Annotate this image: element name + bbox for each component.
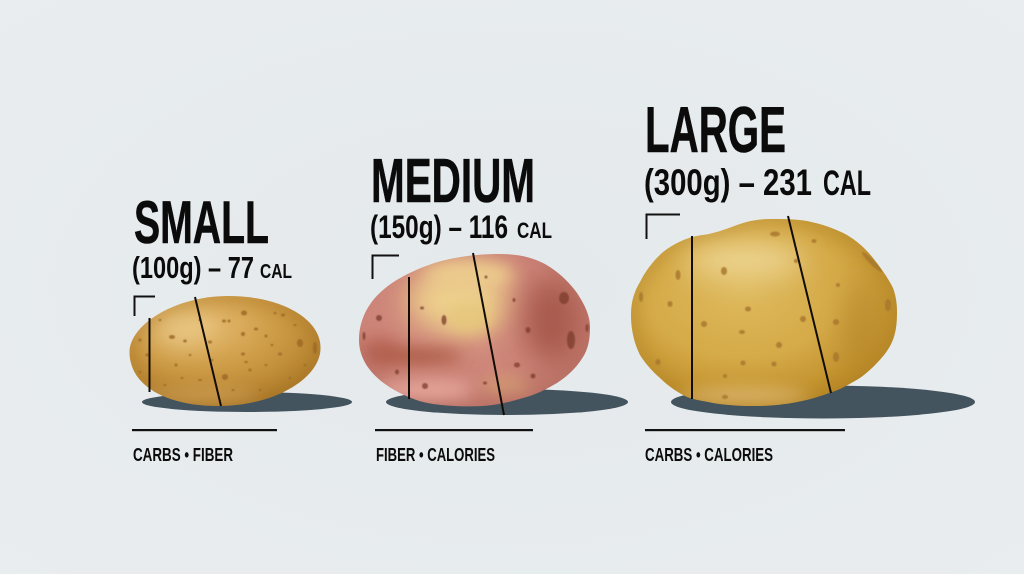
panel: small potato: [125, 189, 352, 465]
shadow: medium: [386, 389, 628, 415]
divider: small: [132, 429, 277, 431]
heading: medium: MEDIUM: [371, 147, 535, 216]
nutrients: medium: FIBER • CALORIES: [376, 445, 495, 465]
potato: small: [130, 296, 320, 406]
corner bracket: medium: [372, 256, 399, 279]
heading: small: SMALL: [134, 189, 269, 256]
nutrients: large: CARBS • CALORIES: [645, 445, 773, 465]
shadow: large: [671, 386, 975, 418]
shadow: small: [142, 392, 352, 412]
panel: large potato: [625, 93, 975, 465]
nutrients: small: CARBS • FIBER: [133, 445, 233, 465]
divider: large: [645, 429, 845, 431]
weight and calories: medium: CAL: [517, 218, 552, 243]
corner bracket: small: [134, 296, 155, 316]
corner bracket: large: [646, 214, 680, 239]
weight and calories: large: CAL: [823, 164, 871, 203]
weight and calories: small: (100g) – 77: [132, 250, 254, 285]
potato: large: [625, 215, 905, 410]
cut lines: medium: [409, 253, 504, 415]
cut lines: small: [150, 297, 221, 406]
panel: medium potato: [355, 147, 628, 465]
weight and calories: medium: (150g) – 116: [370, 209, 508, 245]
weight and calories: small: CAL: [260, 261, 292, 283]
weight and calories: large: (300g) – 231: [644, 162, 812, 203]
heading: large: LARGE: [645, 93, 786, 166]
potato: medium: [355, 250, 595, 410]
divider: medium: [375, 429, 533, 431]
cut lines: large: [692, 216, 831, 399]
